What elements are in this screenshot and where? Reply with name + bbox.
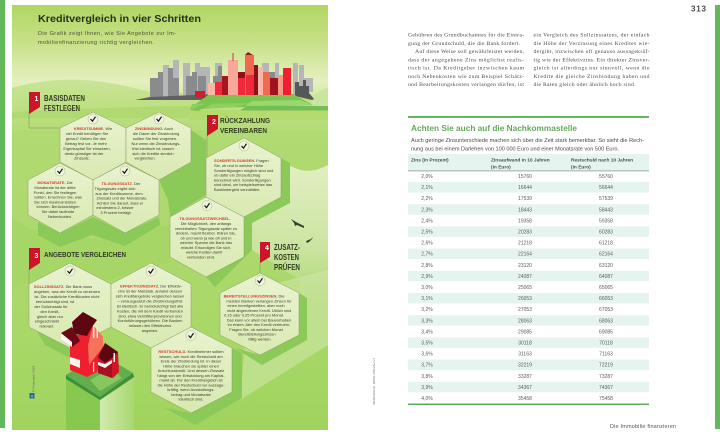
- hexagon: Zinsbindung: sich die Kredite sinnlich: [132, 151, 174, 156]
- table rows: 15760: [518, 174, 532, 180]
- hexagon: Tilgungssatzwechsel: vereinbarten Tilgungssatz später zu: [175, 226, 237, 231]
- table rows: 66053: [599, 296, 613, 302]
- hexagon: Tilgungssatzwechsel: welcher Spanne die Bank das: [180, 240, 232, 245]
- step 4 heading: [260, 242, 300, 272]
- hexagon: Restschuld: RESTSCHULD. Kreditnehmer sollten: [158, 349, 224, 354]
- table rows: 75458: [599, 396, 613, 402]
- hexagon: Restschuld: hängt von der Entwicklung am Kapital-: [157, 373, 225, 378]
- table rows: 62164: [599, 252, 613, 258]
- table rows: 2,4%: [421, 218, 433, 224]
- step 4 heading: ZUSATZ-: [274, 242, 300, 252]
- table header: Zins (in Prozent): [411, 158, 449, 164]
- title: Kreditvergleich in vier Schritten: [38, 14, 201, 25]
- table rows: 2,7%: [421, 252, 433, 258]
- table rows: 26053: [518, 296, 532, 302]
- hexagon: Tilgungssatz: Achten Sie darauf, dass er: [97, 200, 144, 206]
- table rows: 3,4%: [421, 329, 433, 335]
- hexagon: Sondertilgungen: Sie, ob und in welcher Höhe: [214, 163, 264, 168]
- badge 2: 2: [212, 119, 216, 126]
- hexagon: Effektivzinssatz: sich Kreditangebote vergleichen lassen: [116, 294, 184, 298]
- table rows: 73287: [599, 374, 613, 380]
- table header: Zinsaufwand in 10 Jahren: [491, 158, 550, 164]
- body text column 2: die Raten gleich oder ähnlich hoch sind.: [534, 82, 636, 88]
- table rows: 2,3%: [421, 207, 433, 213]
- table header: Restschuld nach 10 Jahren: [571, 158, 633, 164]
- table rows: 56644: [599, 185, 613, 191]
- hexagon: Effektivzinssatz: ist identisch. Er berücksichtigt fast alle: [117, 304, 184, 308]
- body text column 1: Gebühren des Grundbuchamtes für die Eintra-: [408, 32, 524, 38]
- hexagon: Tilgungssatz: aus der Kreditsumme, dem: [95, 191, 143, 196]
- hexagon: Zinsbindung: frist identisch ist, lassen: [132, 146, 174, 151]
- hexagon: Sondertilgungen: berechnet wird. Sondertilgungen: [214, 178, 271, 182]
- hexagon: Restschuld: die Höhe der Restschuld nur aussage-: [157, 382, 225, 388]
- table rows: 57539: [599, 196, 613, 202]
- hexagon: Tilgungssatzwechsel: TILGUNGSSATZWECHSEL.: [179, 216, 231, 221]
- hexagon: Sollzinssatz: ist. Die zusätzliche Kreditkosten nicht: [34, 294, 100, 299]
- hexagon: Restschuld: Höhe brauchen sie später einen: [163, 364, 219, 368]
- table rows: 59358: [599, 218, 613, 224]
- body text column 2: gleich ist allerdings nur sinnvoll, wenn die: [534, 66, 650, 72]
- badge 4: 4: [265, 245, 269, 252]
- table intro: [411, 138, 644, 152]
- table rows: 71163: [599, 352, 613, 358]
- hexagon: Zinsbindung: Nur wenn die Zinsbindungs-: [131, 141, 181, 146]
- hexagon: Tilgungssatz: mindestens 2, besser: [96, 205, 134, 210]
- body text column 1: noch Nebenkosten wie zum Beispiel Schätz-: [408, 74, 524, 80]
- badge 3: 3: [35, 253, 39, 260]
- table rows: 28063: [518, 318, 532, 324]
- hexagon: Sondertilgungen: ob dafür ein Zinsaufschlag: [214, 172, 260, 178]
- body text column 1: [408, 32, 525, 88]
- hexagon: Bereitstellungszinsen: 0,15 oder 0,25 Prozent pro Monat.: [224, 312, 284, 318]
- hexagon: Bereitstellungszinsen: BEREITSTELLUNGSZINSEN. Die: [224, 294, 284, 298]
- hexagon: Effektivzinssatz: sind, etwa Vermittlerprovisionen und: [118, 314, 182, 318]
- intro text: mobilienfinanzierung richtig vergleichen.: [38, 40, 154, 46]
- hexagon: Effektivzinssatz: Kontoführungsgebühren. Die Banken: [118, 318, 182, 323]
- table header: [408, 154, 649, 171]
- table rows: 30118: [518, 340, 532, 346]
- table rows: 3,2%: [421, 307, 433, 313]
- hexagon: Tilgungssatzwechsel: erlaubt. Erkundigen Sie sich,: [181, 245, 231, 250]
- table rows: 74367: [599, 385, 613, 391]
- hexagon: Restschuld: betrag und Monatsrate: [171, 392, 212, 397]
- table heading: Achten Sie auch auf die Nachkommastelle: [411, 123, 577, 133]
- hexagon: Restschuld: Ende der Zinsbindung ist. In dieser: [161, 358, 222, 364]
- table rows: 67053: [599, 307, 613, 313]
- hexagon: Zinsbindung: vergleichen.: [134, 156, 156, 160]
- hexagon: Tilgungssatzwechsel: welche Kosten damit: [186, 250, 223, 254]
- hexagon: Monatsrate: Punkt, den Sie festlegen: [34, 190, 76, 195]
- table rows: 22164: [518, 252, 532, 258]
- body text column 2: die Höhe der Verzinsung eines Kredites wie-: [534, 41, 650, 47]
- table rows: 2,5%: [421, 230, 433, 236]
- hexagon: Tilgungssatz: Zinssatz und der Monatsrate.: [96, 196, 148, 200]
- table rows: 3,3%: [421, 318, 433, 324]
- table rows: 17539: [518, 196, 532, 202]
- step 1 heading: [29, 92, 85, 114]
- hexagon: Monatsrate: können. Berücksichtigen: [37, 204, 79, 209]
- credit: Finanztest: [30, 366, 36, 398]
- step 2 heading: [207, 115, 270, 136]
- table rows: 4,0%: [421, 396, 433, 402]
- body text column 1: dass der angegebene Zins möglichst realis-: [408, 58, 524, 64]
- hexagon: Sollzinssatz: der Sollzinssatz für: [34, 304, 68, 309]
- panel: infographic background: [12, 5, 328, 430]
- hexagon: Sollzinssatz: eingeschränkt: [35, 318, 60, 324]
- table rows: 19358: [518, 218, 532, 224]
- table rows: 2,2%: [421, 196, 433, 202]
- table rows: 31163: [518, 352, 532, 358]
- badge 1: 1: [35, 96, 39, 103]
- hexagon: Effektivzinssatz: EFFEKTIVZINSSATZ. Der Effektiv-: [120, 284, 182, 288]
- hexagon: Bereitstellungszinsen: [220, 273, 299, 355]
- hexagon: Kreditsumme: viel Kredit benötigen Sie: [66, 131, 109, 136]
- body text column 2: tig wie der Effektivzins. Ein direkter Zinsver-: [534, 56, 650, 64]
- table intro: nung aus bei einem Darlehen von 100 000 Euro und einer Monatsrate von 500 Euro.: [411, 146, 619, 152]
- hexagon: Bereitstellungszinsen: meisten Banken verlangen Zinsen für: [226, 298, 292, 304]
- hexagon: Tilgungssatz: TILGUNGSSATZ. Der: [102, 181, 140, 186]
- table rows: 3,5%: [421, 340, 433, 346]
- body text column 2: ein Vergleich des Sollzinssatzes, der einfach: [534, 32, 650, 38]
- hexagon: Monatsrate: Sie dabei laufende: [42, 209, 75, 214]
- table intro: Auch geringe Zinsunterschiede machen sich über die Zeit stark bemerkbar. So sieht die Rech-: [411, 138, 644, 144]
- hexagon: Effektivzinssatz: zins ist der Maßstab, anhand dessen: [118, 288, 182, 294]
- credit: Finanztest: © Finanztest 2019: [32, 366, 36, 392]
- hexagon: Kreditsumme: Zinssatz.: [74, 156, 90, 160]
- hexagon: Bereitstellungszinsen: im ersten Jahr den Kredit verteuern.: [228, 322, 290, 327]
- hexagon: Bereitstellungszinsen: fällig werden.: [248, 336, 272, 342]
- hexagon: Tilgungssatz: [93, 163, 159, 233]
- table rows: 18443: [518, 207, 532, 213]
- hexagon: Restschuld: [151, 327, 232, 413]
- body text column 2: Kredite die gleiche Zinsbindung haben und: [534, 74, 650, 80]
- hexagon: Bereitstellungszinsen: einen bereitgestellten, aber noch: [227, 303, 285, 308]
- table rows: 55760: [599, 174, 613, 180]
- table rows: 20283: [518, 230, 532, 236]
- body text column 1: tisch ist. Da Kreditgeber inzwischen kaum: [408, 66, 525, 72]
- table rows: 3,7%: [421, 363, 433, 369]
- hexagon: Zinsbindung: die Dauer der Zinsbindung: [133, 131, 179, 136]
- table rows: 64087: [599, 274, 613, 280]
- hexagon: Tilgungssatzwechsel: Die Möglichkeit, den anfangs: [181, 221, 231, 226]
- table rows: 3,8%: [421, 374, 433, 380]
- hexagon: Monatsrate: Monatsrate ist der dritte: [34, 185, 76, 190]
- hexagon: Kreditsumme: KREDITSUMME. Wie: [74, 126, 112, 131]
- hexagon: Zinsbindung: [126, 112, 191, 180]
- hexagon: Tilgungssatz: Tilgungssatz ergibt sich: [94, 186, 136, 191]
- table rows: 25065: [518, 285, 532, 291]
- hexagon: Bereitstellungszinsen: nicht abgerufenen Kredit. Üblich sind: [227, 308, 291, 313]
- table rows: [421, 174, 613, 402]
- table rows: 23120: [518, 263, 532, 269]
- step 2 heading: VEREINBAREN: [220, 126, 267, 135]
- table rows: 2,6%: [421, 241, 433, 247]
- hexagon: Bereitstellungszinsen: Bereitstellungszinsen: [238, 332, 276, 336]
- hexagon: Sondertilgungen: SONDERTILGUNGEN. Fragen: [214, 158, 269, 163]
- hexagon: Monatsrate: Sie sich maximal leisten: [34, 200, 76, 204]
- intro text: Die Grafik zeigt Ihnen, wie Sie Angebote zur Im-: [38, 31, 176, 37]
- table rows: 3,0%: [421, 285, 433, 291]
- skyline illustration: [135, 52, 328, 111]
- table header: (in Euro): [491, 164, 511, 170]
- intro text: [38, 31, 176, 46]
- table rows: 3,6%: [421, 352, 433, 358]
- step 2 heading: RÜCKZAHLUNG: [220, 116, 270, 125]
- right page green edge bar: [715, 5, 720, 429]
- body text column 2: [534, 32, 650, 88]
- table rows: 27053: [518, 307, 532, 313]
- hexagon: Monatsrate: sollten. Errechnen Sie, was: [34, 194, 82, 200]
- step 1 heading: BASISDATEN: [44, 94, 85, 103]
- hexagon: Sondertilgungen: [206, 138, 281, 217]
- body text column 1: und Bearbeitungskosten verlangen dürfen, ist: [408, 81, 524, 88]
- body text column 1: gung der Grundschuld, die die Bank fordert.: [408, 40, 521, 47]
- hexagon: Monatsrate: Nebenkosten.: [48, 214, 72, 219]
- icon: birds: [291, 219, 313, 243]
- step 3 heading: ANGEBOTE VERGLEICHEN: [44, 250, 126, 259]
- hexagon: Effektivzinssatz: Kosten, die mit dem Kredit verbunden: [117, 308, 183, 314]
- table rows: 61218: [599, 241, 613, 247]
- table rows: 63120: [599, 263, 613, 269]
- table rows: 58443: [599, 207, 613, 213]
- table rows: 2,8%: [421, 263, 433, 269]
- step 4 heading: KOSTEN: [274, 252, 299, 262]
- hexagon: Kreditsumme: desto günstiger ist der: [65, 151, 104, 156]
- table rows: 65065: [599, 285, 613, 291]
- hexagon: Restschuld: wissen, wie hoch die Restschuld am: [159, 354, 223, 359]
- hexagon: Sollzinssatz: gleich aber nur: [37, 314, 64, 319]
- table rows: 70118: [599, 340, 613, 346]
- table rows: 34367: [518, 385, 532, 391]
- hexagon: Kreditsumme: genau? Geben Sie den: [66, 136, 106, 141]
- body text column 2: dergibt, inzwischen oft genauso aussagekräf-: [534, 48, 650, 55]
- hexagon: Sondertilgungen: Sondertilgungen möglich sind und: [214, 168, 273, 173]
- hexagon: Restschuld: kräftig, wenn Ausstattungs-: [167, 387, 215, 392]
- hexagon: Sollzinssatz: [29, 263, 111, 348]
- hexagon: Tilgungssatzwechsel: ändern, macht flexibel. Klären Sie,: [176, 230, 236, 236]
- step 4 heading: PRÜFEN: [274, 262, 300, 272]
- table rows: 60283: [599, 230, 613, 236]
- table rows: 21218: [518, 241, 532, 247]
- hexagon: Bereitstellungszinsen: Das kann vor allem bei Bauvorhaben: [227, 318, 291, 322]
- hexagon: Tilgungssatz: 3 Prozent beträgt.: [100, 210, 132, 215]
- table rows: 24087: [518, 274, 532, 280]
- hexagon: Monatsrate: MONATSRATE. Die: [37, 180, 73, 185]
- table rows: 35458: [518, 396, 532, 402]
- hexagon: Restschuld: Anschlusskredit. Und dessen Zinssatz: [158, 368, 224, 373]
- page footer: Die Immobilie finanzieren: [610, 424, 676, 430]
- credit: Finanztest: t: [31, 394, 33, 398]
- table rows: 2,0%: [421, 174, 433, 180]
- hexagon: Kreditsumme: [60, 112, 126, 180]
- hexagon: Effektivzinssatz: müssen den Effektivzins: [129, 323, 171, 328]
- page number: 313: [691, 4, 707, 14]
- table header: (in Euro): [571, 164, 591, 170]
- hexagon: Sondertilgungen: sind ideal, um beispielsweise das: [214, 182, 272, 187]
- body text column 1: Auf diese Weise soll gewährleistet werden,: [415, 48, 525, 55]
- hexagon: Effektivzinssatz: [111, 263, 191, 348]
- table rows: 2,1%: [421, 185, 433, 191]
- hexagon: Sollzinssatz: angeben, was der Kredit zu verzinsen: [34, 289, 100, 294]
- hexagon: Tilgungssatzwechsel: verbunden sind.: [187, 254, 215, 260]
- table rows: 16644: [518, 185, 532, 191]
- step 1 heading: FESTLEGEN: [44, 104, 80, 113]
- honeycomb shadows: [35, 130, 307, 425]
- table rows: 69085: [599, 329, 613, 335]
- hexagon: Zinsbindung: sollten Sie fest vorgeben.: [133, 136, 177, 141]
- table zebra rows: [408, 182, 649, 392]
- table rows: 2,9%: [421, 274, 433, 280]
- table rows: 68063: [599, 318, 613, 324]
- hexagon: Kreditsumme: Eigenkapital Sie einsetzen,: [63, 146, 111, 151]
- table rows: 3,9%: [421, 385, 433, 391]
- hexagon: Monatsrate: [28, 163, 93, 233]
- left page green edge bar: [0, 0, 5, 428]
- connector lines: [29, 112, 260, 284]
- house on pedestal illustration: [61, 312, 134, 430]
- table rows: 33287: [518, 374, 532, 380]
- hexagon: Sondertilgungen: Baukindergeld verzutilden.: [214, 187, 260, 192]
- vertical image credit: INFOGRAFIK: ROSE ROLVAU LT: [372, 358, 376, 405]
- hexagon: Effektivzinssatz: – vorausgesetzt die Zinsbindungsfrist: [117, 298, 183, 304]
- hexagon: Restschuld: markt ab. Für den Kreditvergleich ist: [159, 378, 224, 382]
- hexagon: Sollzinssatz: relevant.: [39, 324, 55, 328]
- table panel: Nachkommastelle: [408, 116, 649, 405]
- hexagon: Tilgungssatzwechsel: ob und wenn ja wie oft und in: [180, 236, 232, 240]
- hexagon: Zinsbindung: ZINSBINDUNG. Auch: [135, 126, 173, 131]
- table rows: 29085: [518, 329, 532, 335]
- hexagon: Kreditsumme: Betrag fest vor. Je mehr: [65, 141, 108, 146]
- step 3 heading: [29, 248, 126, 270]
- hexagon: Effektivzinssatz: angeben.: [142, 328, 158, 333]
- hexagon: Restschuld: identisch sind.: [179, 396, 203, 402]
- table rows: 3,1%: [421, 296, 433, 302]
- hexagon: Bereitstellungszinsen: Fragen Sie, ob welchen Monat: [229, 327, 284, 332]
- hexagon: Sollzinssatz: berücksichtigt sind, ist: [36, 299, 75, 304]
- hexagon: Sollzinssatz: SOLLZINSSATZ. Die Bank muss: [34, 284, 92, 289]
- table rows: 32219: [518, 363, 532, 369]
- hexagon: Tilgungssatzwechsel: [170, 197, 244, 277]
- table rows: 72219: [599, 363, 613, 369]
- hexagon: Sollzinssatz: den Kredit-: [40, 309, 60, 314]
